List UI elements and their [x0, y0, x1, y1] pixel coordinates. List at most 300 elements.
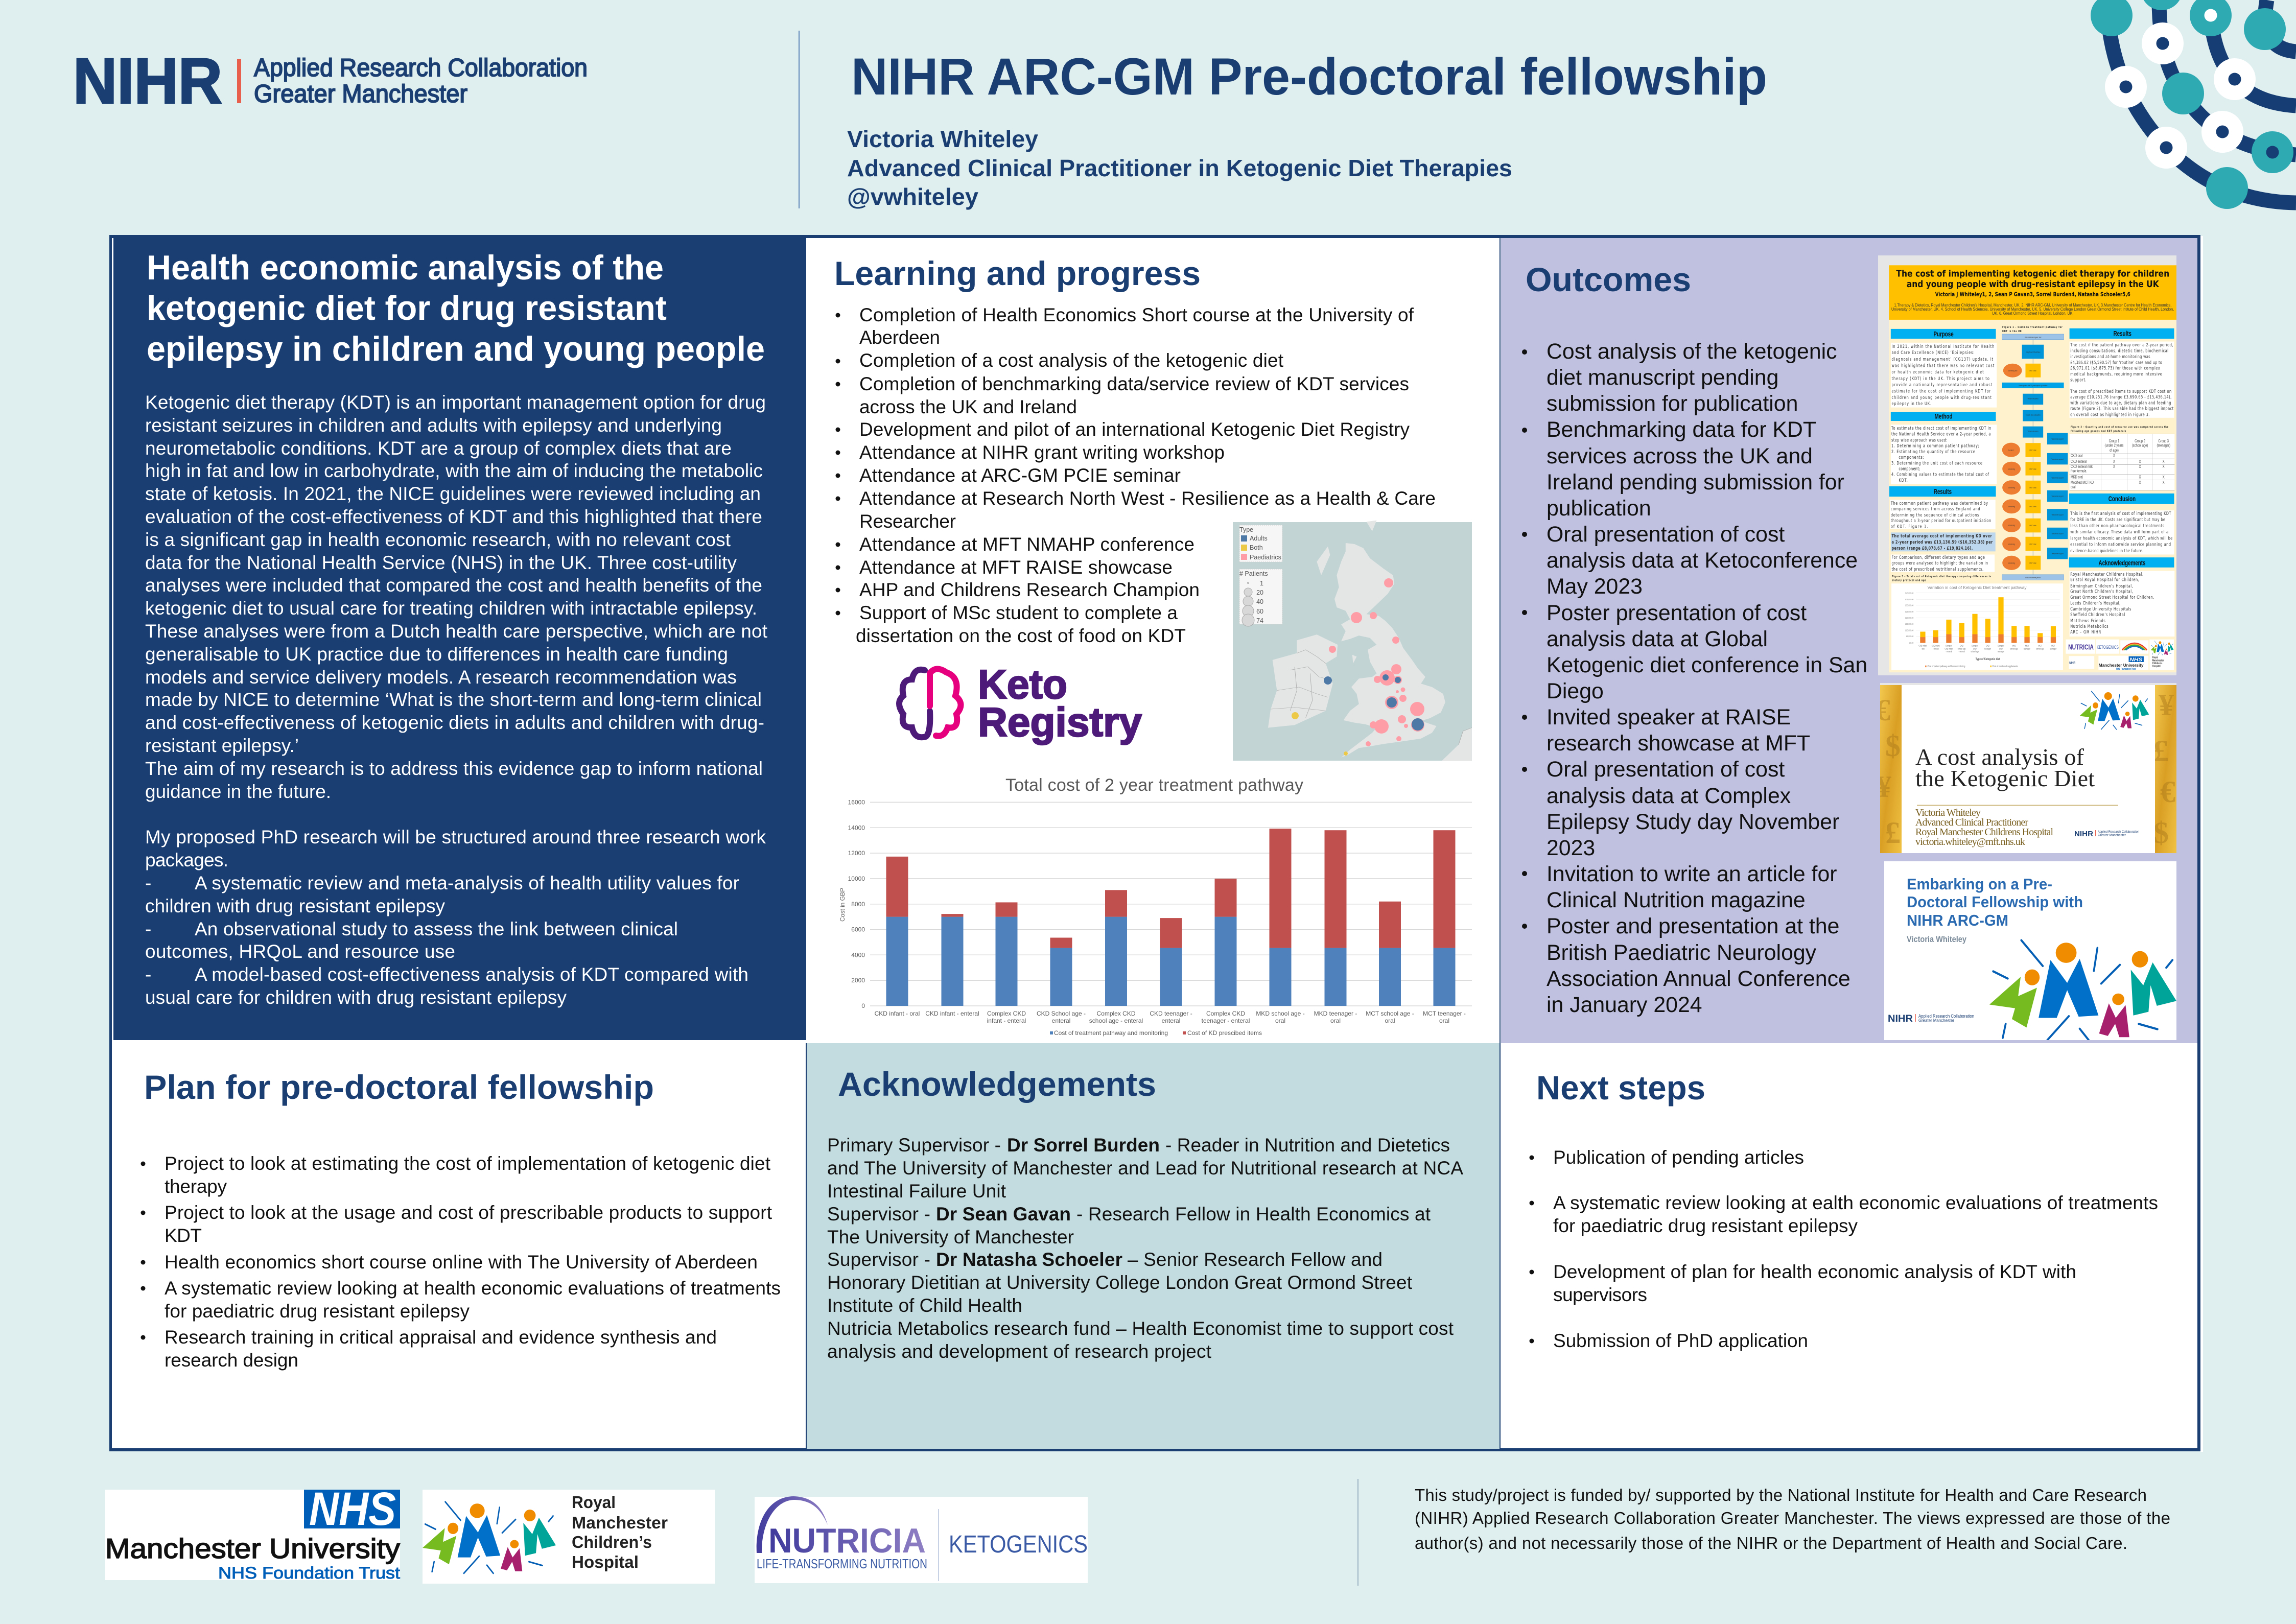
bar chart: total cost of 2 year treatment pathway: 12000	[848, 850, 865, 857]
bar chart: total cost of 2 year treatment pathway: oral	[1330, 1017, 1341, 1024]
poster chart: £10,000.00	[1905, 629, 1914, 632]
acknowledgements text	[827, 1135, 1463, 1362]
poster chart: - oral	[1921, 647, 1925, 650]
thumbnail: conference poster: components;	[1899, 455, 1924, 460]
thumbnail: conference poster: KDT.	[1899, 478, 1908, 483]
bar chart: total cost of 2 year treatment pathway: oral	[1385, 1017, 1395, 1024]
poster flow diagram: Monitoring	[2008, 543, 2015, 546]
acknowledgements text: – Senior Research Fellow and	[1128, 1249, 1383, 1270]
poster chart: Complex	[1946, 644, 1952, 647]
thumbnail: conference poster: The cost of prescribed items to support KDT cost on	[2070, 389, 2171, 394]
bullet list: learning activities: Attendance at ARC-GM PCIE seminar	[859, 465, 1181, 486]
bar chart: total cost of 2 year treatment pathway: 2000	[851, 977, 865, 984]
poster flow diagram: Screening and	[2008, 369, 2017, 372]
chart title: Total cost of 2 year treatment pathway	[1005, 775, 1303, 795]
bar chart: total cost of 2 year treatment pathway: enteral	[1052, 1017, 1070, 1024]
heading: acknowledgements: Acknowledgements	[838, 1065, 1156, 1103]
panel heading	[147, 248, 765, 368]
bar chart: total cost of 2 year treatment pathway: 8000	[851, 901, 865, 908]
thumbnail: Embarking on a Pre-Doctoral Fellowship slide: NIHR ARC-GM	[1907, 911, 2008, 929]
thumbnail: conference poster: the cost of prescribed nutritional supplements.	[1891, 567, 1983, 572]
heading: outcomes: Outcomes	[1526, 261, 1691, 298]
poster flow diagram: MDT clinic	[2030, 468, 2036, 470]
thumbnail: conference poster: Cambridge University Hospitals	[2070, 606, 2131, 611]
acknowledgements text: Supervisor -	[827, 1249, 930, 1270]
body text	[145, 392, 768, 1008]
thumbnail: conference poster: dietary protocol and age	[1892, 579, 1926, 582]
logo: Manchester University NHS Foundation Trust: NHS Foundation Trust	[218, 1564, 400, 1582]
logo: Royal Manchester Children's Hospital: Hospital	[572, 1552, 639, 1571]
poster chart: £35,000.00	[1905, 598, 1914, 601]
bullet list: plan: research design	[165, 1350, 298, 1371]
poster chart: school age	[2036, 647, 2044, 650]
thumbnail: A cost analysis of the Ketogenic Diet slide: £	[1885, 816, 1901, 850]
bar chart: total cost of 2 year treatment pathway: oral	[1439, 1017, 1449, 1024]
funding statement: This study/project is funded by/ supported by the National Institute for Health and Care Research	[1415, 1486, 2147, 1504]
thumbnail: conference poster: Results	[1934, 488, 1952, 496]
thumbnail: conference poster: Sheffield Children’s Hospital	[2070, 612, 2125, 617]
poster flow diagram: Telephone support	[2051, 514, 2064, 516]
bullet list: outcomes: Cost analysis of the ketogenic	[1547, 339, 1837, 364]
thumbnail: conference poster: or health economic data for ketogenic diet	[1891, 369, 1984, 374]
bar chart: total cost of 2 year treatment pathway: 16000	[848, 799, 865, 806]
thumbnail: conference poster: for DRE in the UK. Costs are significant but may be	[2070, 517, 2165, 522]
poster flow diagram: If under 2	[2008, 449, 2014, 452]
bar chart: total cost of 2 year treatment pathway: Complex CKD	[1206, 1010, 1245, 1017]
poster flow diagram: Monitoring	[2008, 468, 2015, 470]
bar chart: total cost of 2 year treatment pathway: MKD teenager -	[1314, 1010, 1357, 1017]
thumbnail: conference poster: determining the sequence of clinical actions	[1891, 512, 1979, 517]
thumbnail: conference poster: and young people with drug-resistant epilepsy in the UK	[1907, 278, 2160, 290]
bar chart: total cost of 2 year treatment pathway: oral	[1275, 1017, 1285, 1024]
body text: usual care for children with drug resistant epilepsy	[145, 987, 567, 1008]
map legend: patients: 74	[1256, 617, 1263, 624]
poster flow diagram: Virtual education	[2028, 397, 2039, 400]
poster flow diagram: Telephone support	[2051, 477, 2064, 479]
poster flow diagram: MDT clinic	[2030, 543, 2036, 546]
poster logos: Manchester University	[2099, 663, 2144, 668]
poster chart: £0.00	[1909, 641, 1914, 644]
thumbnail: conference poster: Group 2	[2135, 439, 2145, 443]
acknowledgements text: - Reader in Nutrition and Dietetics	[1165, 1135, 1450, 1156]
poster chart: £15,000.00	[1905, 622, 1914, 625]
thumbnail: Embarking on a Pre-Doctoral Fellowship slide: Embarking on a Pre-	[1907, 875, 2052, 893]
bullet list: learning activities: Support of MSc student to complete a	[859, 602, 1178, 623]
map legend: patients: 1	[1260, 580, 1263, 587]
heading: learning and progress: Learning and progress	[834, 254, 1201, 292]
thumbnail: conference poster: support.	[2070, 378, 2087, 383]
bar chart: total cost of 2 year treatment pathway: CKD infant - enteral	[925, 1010, 979, 1017]
poster chart: school age	[2010, 647, 2018, 650]
poster flow diagram: Telephone support	[2051, 438, 2064, 440]
thumbnail: conference poster: X	[2163, 465, 2165, 469]
poster chart: CKD	[1986, 644, 1989, 647]
thumbnail: conference poster: (school age)	[2132, 444, 2148, 448]
panel: plan for pre-doctoral fellowship	[112, 1040, 806, 1448]
poster flow diagram: Telephone/Virtual/New	[2026, 351, 2041, 354]
thumbnail: A cost analysis of the Ketogenic Diet slide: Greater Manchester	[2098, 834, 2126, 837]
panel: acknowledgements	[806, 1043, 1501, 1449]
bullet list: next steps	[1530, 1147, 2158, 1351]
bullet list: outcomes: research showcase at MFT	[1547, 731, 1810, 756]
map legend: type: Both	[1250, 544, 1263, 551]
thumbnail: conference poster: diagnosis and management’ (CG137) update, it	[1891, 357, 1993, 362]
thumbnail: conference poster: The total average cost of implementing KD over	[1891, 533, 1992, 538]
poster flow diagram: MDT clinic	[2030, 449, 2036, 452]
body text: A systematic review and meta-analysis of health utility values for	[195, 873, 739, 893]
acknowledgements text: The University of Manchester	[827, 1227, 1074, 1248]
map: KDT services across UK and Ireland	[1233, 521, 1472, 761]
poster chart: - enteral	[1959, 650, 1965, 653]
thumbnail: A cost analysis of the Ketogenic Diet slide: A cost analysis of	[1915, 744, 2084, 770]
bullet list: learning activities: dissertation on the cost of food on KDT	[856, 625, 1186, 646]
thumbnail: conference poster: To estimate the direct cost of implementing KDT in	[1891, 426, 1991, 431]
thumbnail: conference poster: with similar efficacy. These data will form part of a	[2070, 529, 2168, 534]
thumbnail: conference poster: on overall cost as highlighted in Figure 3.	[2070, 412, 2149, 417]
logo: NIHR Applied Research Collaboration Greater Manchester: NIHR	[73, 45, 222, 117]
bar chart: total cost of 2 year treatment pathway: 0	[861, 1002, 865, 1009]
poster chart: teenager	[2024, 647, 2030, 650]
bullet list: outcomes: 2023	[1547, 836, 1595, 860]
thumbnail: conference poster: Nutricia Metabolics	[2070, 624, 2108, 629]
bullet list: outcomes: submission for publication	[1547, 391, 1798, 416]
poster flow diagram	[2002, 334, 2068, 580]
thumbnail: conference poster: 3. Determining the unit cost of each resource	[1891, 460, 1982, 466]
poster chart: CKD infant	[1932, 644, 1940, 647]
acknowledgements text: Dr Sean Gavan	[936, 1204, 1071, 1225]
bullet list: learning activities: Attendance at NIHR grant writing workshop	[859, 442, 1225, 463]
bullet list: outcomes: analysis data at Global	[1547, 627, 1768, 651]
thumbnail: conference poster: provide a nationally representative and robust	[1891, 382, 1992, 387]
poster chart: £20,000.00	[1905, 617, 1914, 619]
logo: NIHR Applied Research Collaboration Greater Manchester	[73, 45, 588, 117]
logo: Manchester University NHS Foundation Trust: NHS	[309, 1483, 396, 1535]
logo: Royal Manchester Children's Hospital: Royal	[572, 1493, 616, 1512]
poster chart: MCT	[2051, 644, 2055, 647]
map legend: patients	[1239, 569, 1282, 626]
thumbnail: conference poster: 2. Estimating the quantity of the resource	[1891, 449, 1975, 454]
bullet list: outcomes: publication	[1547, 496, 1651, 521]
acknowledgements text: - Research Fellow in Health Economics at	[1076, 1204, 1431, 1225]
poster logos	[2066, 640, 2174, 670]
bullet list: plan: Project to look at estimating the cost of implementation of ketogenic diet	[165, 1153, 771, 1174]
thumbnail: conference poster: Leeds Children’s Hospital,	[2070, 601, 2120, 606]
thumbnail: conference poster: X	[2113, 454, 2115, 458]
thumbnail: A cost analysis of the Ketogenic Diet slide: Royal Manchester Childrens Hospital	[1915, 827, 2053, 838]
poster chart: Cost of patient pathway and home monitoring	[1928, 665, 1965, 668]
thumbnail: conference poster: X	[2163, 481, 2165, 485]
thumbnail: conference poster	[1878, 255, 2176, 675]
poster chart: Complex	[1972, 644, 1978, 647]
bar chart: total cost of 2 year treatment pathway: 4000	[851, 951, 865, 958]
bullet list: next steps: A systematic review looking at ealth economic evaluations of treatments	[1553, 1192, 2158, 1213]
poster chart: Complex	[1998, 644, 2004, 647]
logo: Nutricia Ketogenics: LIFE-TRANSFORMING NUTRITION	[757, 1556, 927, 1571]
poster flow diagram: End of treatment period	[2025, 577, 2041, 579]
thumbnail: A cost analysis of the Ketogenic Diet slide	[1875, 683, 2176, 853]
thumbnail: conference poster: evidence-based guidelines in the future.	[2070, 548, 2143, 553]
bullet list: learning activities: Attendance at MFT RAISE showcase	[859, 557, 1173, 578]
chart legend	[1050, 1029, 1262, 1037]
thumbnail: conference poster: Figure 1 – Common Treatment pathway for	[2002, 326, 2063, 329]
poster flow diagram: Face to face education	[2026, 414, 2041, 416]
thumbnail: A cost analysis of the Ketogenic Diet slide: Advanced Clinical Practitioner	[1915, 817, 2028, 828]
thumbnail: conference poster: children and young people with drug-resistant	[1891, 395, 1992, 400]
map legend: type: Paediatrics	[1250, 554, 1281, 561]
thumbnail: conference poster: Modified MCT KD	[2071, 481, 2094, 485]
thumbnail: conference poster: £4,386.02 ($5,590.57) for ‘routine’ care and up to	[2070, 360, 2162, 365]
poster flow diagram: Monitoring	[2008, 524, 2015, 527]
acknowledgements text: Primary Supervisor -	[827, 1135, 1001, 1156]
logo: Keto Registry	[899, 662, 1142, 745]
acknowledgements text: Institute of Child Health	[827, 1295, 1022, 1316]
bullet list: outcomes: Poster presentation of cost	[1547, 601, 1807, 625]
author details	[847, 126, 1512, 210]
panel: outcomes	[1501, 238, 2197, 1043]
body text: models and service delivery models. A research recommendation was	[145, 667, 737, 688]
bullet list: learning activities: Attendance at MFT NMAHP conference	[859, 534, 1194, 555]
thumbnail: conference poster: comparing services from across England and	[1891, 506, 1980, 511]
thumbnail: conference poster: therapy (KDT) in the UK. This project aims to	[1891, 376, 1989, 381]
thumbnail: conference poster: estimate for the cost of implementing KDT for	[1891, 388, 1991, 394]
thumbnail: conference poster: with variations due to age, dietary plan and feeding	[2070, 400, 2171, 406]
bullet list: plan: Project to look at the usage and cost of prescribable products to support	[165, 1202, 772, 1223]
bullet list: outcomes: Invitation to write an article for	[1547, 862, 1837, 886]
thumbnail: conference poster: (under 2 years	[2105, 444, 2124, 448]
logo: NIHR Applied Research Collaboration Greater Manchester: Applied Research Collaboration	[254, 54, 588, 82]
map legend: type: Adults	[1250, 535, 1268, 542]
body text: My proposed PhD research will be structured around three research work	[145, 827, 766, 848]
bullet list: learning activities: Completion of Health Economics Short course at the University of	[859, 304, 1414, 325]
bullet list: next steps: Submission of PhD application	[1553, 1330, 1808, 1351]
bar chart: total cost of 2 year treatment pathway: Complex CKD	[1096, 1010, 1136, 1017]
thumbnail: A cost analysis of the Ketogenic Diet slide: €	[1875, 693, 1890, 727]
body text: resistant seizures in children and adults with epilepsy and underlying	[145, 415, 722, 436]
logo: Nutricia Ketogenics: KETOGENICS	[949, 1531, 1088, 1558]
body text: These analyses were from a Dutch health care perspective, which are not	[145, 621, 768, 642]
bullet list: outcomes: Diego	[1547, 679, 1604, 703]
bullet list: outcomes: diet manuscript pending	[1547, 365, 1778, 390]
panel heading: ketogenic diet for drug resistant	[147, 289, 667, 327]
map legend: patients: 40	[1256, 598, 1263, 605]
body text: evaluation of the cost-effectiveness of KDT and this highlighted that there	[145, 506, 762, 527]
thumbnail: A cost analysis of the Ketogenic Diet slide: ¥	[1876, 770, 1891, 804]
bullet list: outcomes: Association Annual Conference	[1547, 967, 1850, 991]
body text: and cost-effectiveness of ketogenic diets in adults and children with drug-	[145, 712, 764, 733]
body text: -	[145, 919, 151, 939]
icon: network of arcs and dots	[2091, 0, 2296, 209]
funding statement	[1415, 1486, 2170, 1552]
poster chart: £25,000.00	[1905, 610, 1914, 613]
thumbnail: conference poster: X	[2139, 460, 2141, 464]
poster chart: CKD infant	[1918, 644, 1927, 647]
chart legend: Cost of KD prescibed items	[1187, 1029, 1262, 1037]
thumbnail: conference poster: £6,971.01 ($8,875.73) for those with complex	[2070, 366, 2160, 371]
body text: is a significant gap in health economic research, with no relevant cost	[145, 529, 731, 550]
body text: ketogenic diet to usual care for treating children with intractable epilepsy.	[145, 598, 757, 619]
bullet list: plan: Health economics short course online with The University of Aberdeen	[165, 1252, 758, 1273]
panel: health economic analysis	[113, 238, 806, 1040]
body text: resistant epilepsy.’	[145, 735, 299, 756]
map legend: patients: 60	[1256, 608, 1263, 615]
acknowledgements text: Honorary Dietitian at University College London Great Ormond Street	[827, 1272, 1413, 1293]
bullet list: outcomes: Clinical Nutrition magazine	[1547, 888, 1806, 912]
thumbnail: conference poster: Method	[1935, 413, 1952, 420]
logo: Keto Registry: Keto	[978, 662, 1067, 707]
thumbnail: A cost analysis of the Ketogenic Diet slide: the Ketogenic Diet	[1915, 765, 2095, 791]
bullet list: learning activities: Attendance at Research North West - Resilience as a Health & Care	[859, 488, 1436, 509]
bullet list: learning activities	[836, 304, 1436, 646]
poster chart: £5,000.00	[1906, 635, 1914, 638]
poster chart: teenager	[2050, 647, 2057, 650]
thumbnail: conference poster: essential to inform nationwide service planning and	[2070, 542, 2171, 547]
poster chart: MKD	[2025, 644, 2029, 647]
poster chart: Variation in cost of Ketogenic Diet treatment pathway	[1928, 585, 2027, 590]
body text: analyses were included that compared the cost and health benefits of the	[145, 575, 762, 596]
bullet list: outcomes: Epilepsy Study day November	[1547, 810, 1839, 834]
thumbnail: conference poster: This is the first analysis of cost of implementing KDT	[2070, 511, 2171, 516]
thumbnail: A cost analysis of the Ketogenic Diet slide: $	[2153, 816, 2169, 850]
thumbnail: conference poster: 1. Determining a common patient pathway;	[1891, 443, 1979, 449]
bullet list: learning activities: across the UK and Ireland	[859, 396, 1077, 417]
thumbnail: Embarking on a Pre-Doctoral Fellowship slide: NIHR	[1888, 1014, 1913, 1024]
bullet list: next steps: for paediatric drug resistant epilepsy	[1553, 1215, 1858, 1236]
bullet list: outcomes: May 2023	[1547, 574, 1643, 599]
thumbnail: Embarking on a Pre-Doctoral Fellowship slide: Applied Research Collaboration	[1918, 1014, 1974, 1019]
thumbnail: conference poster: University of Manchester, UK. 4. School of Health Sciences, University of Manchester, UK. 5. University College London Great Ormond Street Intitute of Child Health, London,	[1891, 308, 2174, 312]
thumbnail: A cost analysis of the Ketogenic Diet slide: ¥	[2159, 688, 2174, 722]
body text: The aim of my research is to address this evidence gap to inform national	[145, 758, 763, 779]
thumbnail: Embarking on a Pre-Doctoral Fellowship slide	[1884, 861, 2176, 1040]
poster chart: teenager	[1998, 650, 2004, 653]
poster logos: NHS	[2129, 656, 2143, 663]
thumbnail: conference poster: free formula	[2071, 469, 2087, 474]
poster flow diagram: MDT clinic	[2030, 525, 2036, 527]
thumbnail: conference poster: step wise approach was used:	[1891, 437, 1947, 443]
logo: NIHR Applied Research Collaboration Greater Manchester: Greater Manchester	[254, 80, 467, 108]
poster logos: Hospital	[2152, 665, 2161, 668]
poster flow diagram: Virtual education	[2028, 430, 2039, 432]
poster flow diagram: MDT clinic	[2030, 486, 2036, 489]
acknowledgements text: Nutricia Metabolics research fund – Health Economist time to support cost	[827, 1318, 1454, 1339]
map legend: patients: 20	[1256, 589, 1263, 596]
bar chart: total cost of 2 year treatment pathway: Cost in GBP	[839, 888, 846, 922]
thumbnail: conference poster: of age)	[2110, 449, 2119, 453]
thumbnail: conference poster: Great Ormond Street Hospital for Children,	[2070, 595, 2154, 600]
thumbnail: conference poster: oral	[2071, 485, 2076, 489]
bullet list: next steps: Publication of pending articles	[1553, 1147, 1804, 1168]
thumbnail: conference poster: Group 3	[2158, 439, 2169, 443]
poster flow diagram: Monitoring	[2008, 486, 2015, 489]
body text: Ketogenic diet therapy (KDT) is an important management option for drug	[145, 392, 766, 413]
body text: made by NICE to determine ‘What is the short-term and long-term clinical	[145, 689, 762, 710]
body text: state of ketosis. In 2021, the NICE guidelines were reviewed including an	[145, 483, 761, 504]
bullet list: learning activities: Researcher	[859, 511, 956, 532]
poster flow diagram: Telephone support	[2051, 532, 2064, 535]
thumbnail: conference poster: X	[2113, 465, 2115, 469]
poster chart: CKD	[1960, 644, 1963, 647]
poster chart: school age	[1958, 647, 1965, 650]
heading: next steps: Next steps	[1536, 1069, 1705, 1107]
poster logos: Royal	[2152, 656, 2158, 660]
poster chart: school age	[1971, 650, 1979, 653]
thumbnail: conference poster: CKD enteral milk	[2071, 465, 2093, 469]
poster flow diagram: Development of KDT prescription by dietitian	[2019, 385, 2047, 387]
poster chart: CKD infant	[1944, 647, 1953, 650]
poster chart: - enteral	[1946, 650, 1952, 653]
poster logos: NHS Foundation Trust	[2116, 668, 2136, 670]
body text: An observational study to assess the link between clinical	[195, 919, 678, 939]
thumbnail: conference poster: was highlighted that there was no relevant cost	[1891, 363, 1994, 368]
poster chart: CKD	[1973, 647, 1977, 650]
thumbnail: conference poster: the National Health Service over a 2-year period, a	[1891, 432, 1990, 437]
logo: Royal Manchester Children's Hospital: Children’s	[572, 1533, 652, 1551]
bar chart: total cost of 2 year treatment pathway	[839, 775, 1472, 1037]
thumbnail: conference poster: Birmingham Children’s Hospital,	[2070, 583, 2133, 589]
thumbnail: conference poster: The cost if the patient pathway over a 2-year period,	[2070, 342, 2173, 347]
thumbnail: A cost analysis of the Ketogenic Diet slide: Applied Research Collaboration	[2098, 831, 2139, 834]
bullet list: outcomes: Oral presentation of cost	[1547, 757, 1785, 782]
thumbnail: conference poster: MKD oral	[2071, 476, 2083, 480]
bullet list: outcomes: Poster and presentation at the	[1547, 914, 1839, 938]
body text: guidance in the future.	[145, 781, 331, 802]
acknowledgements text: and The University of Manchester and Lead for Nutritional research at NCA	[827, 1158, 1463, 1179]
thumbnail: conference poster: Figure 3 – Total cost of Ketogenic diet therapy comparing differences in	[1892, 575, 1991, 578]
thumbnail: A cost analysis of the Ketogenic Diet slide: $	[1885, 729, 1901, 763]
body text: -	[145, 964, 151, 985]
bar chart: total cost of 2 year treatment pathway: infant - enteral	[987, 1017, 1026, 1024]
thumbnail: conference poster: X	[2163, 460, 2165, 464]
bullet list: learning activities: Development and pilot of an international Ketogenic Diet Registry	[859, 419, 1410, 440]
thumbnail: conference poster: less than other non-pharmacological treatments	[2070, 523, 2164, 529]
thumbnail: conference poster: following age groups and KDT protocols	[2071, 430, 2126, 433]
body text: children with drug resistant epilepsy	[145, 896, 446, 916]
bullet list: plan	[141, 1153, 781, 1371]
thumbnail: conference poster: person (range £8,078.67 - £19,824.16).	[1891, 546, 1973, 551]
bullet list: next steps: Development of plan for health economic analysis of KDT with	[1553, 1261, 2076, 1282]
thumbnail: conference poster: For Comparison, different dietary types and age	[1891, 555, 1985, 560]
thumbnail: conference poster: Victoria J Whiteley1, 2, Sean P Gavan3, Sorrel Burden4, Natasha Schoeler5,6	[1935, 291, 2130, 298]
bar chart: total cost of 2 year treatment pathway: 6000	[851, 926, 865, 933]
logo: Nutricia Ketogenics: NUTRICIA	[768, 1521, 926, 1560]
thumbnail: A cost analysis of the Ketogenic Diet slide: NIHR	[2074, 830, 2093, 838]
bar chart: total cost of 2 year treatment pathway: school age - enteral	[1089, 1017, 1143, 1024]
bar chart: total cost of 2 year treatment pathway: CKD teenager -	[1150, 1010, 1192, 1017]
thumbnail: conference poster: Group 1	[2109, 439, 2119, 443]
bar chart: total cost of 2 year treatment pathway: enteral	[1162, 1017, 1180, 1024]
thumbnail: Embarking on a Pre-Doctoral Fellowship slide: Victoria Whiteley	[1907, 934, 1966, 944]
body text: -	[145, 873, 151, 893]
thumbnail: conference poster: of KDT. Figure 1.	[1891, 524, 1928, 529]
thumbnail: conference poster: UK. 6. Great Ormond Street Hospital, London, UK.	[1992, 312, 2073, 316]
author details: Advanced Clinical Practitioner in Ketogenic Diet Therapies	[847, 155, 1512, 181]
poster chart: teenager	[1984, 647, 1992, 650]
poster logos: KETOGENICS	[2097, 645, 2119, 650]
body text: data for the National Health Service (NHS) in the UK. Three cost-utility	[145, 552, 737, 573]
bullet list: next steps: supervisors	[1553, 1284, 1647, 1305]
poster logos: Children’s	[2152, 662, 2163, 665]
thumbnail: conference poster: investigations and at-home monitoring was	[2070, 354, 2150, 359]
panel heading: Health economic analysis of the	[147, 248, 664, 287]
thumbnail: Embarking on a Pre-Doctoral Fellowship slide: Greater Manchester	[1918, 1018, 1954, 1023]
body text: outcomes, HRQoL and resource use	[145, 941, 455, 962]
body text: packages.	[145, 850, 228, 870]
thumbnail: conference poster: and Care Excellence (NICE) ‘Epilepsies:	[1891, 350, 1974, 356]
body text: A model-based cost-effectiveness analysis of KDT compared with	[195, 964, 748, 985]
thumbnail: conference poster: X	[2113, 460, 2115, 464]
thumbnail: conference poster: 1.Therapy & Dietetics, Royal Manchester Children’s Hospital, Manchester, UK. 2. NIHR ARC-GM, University of Manchester, UK. 3.Manchester Centre for Health Economics,	[1894, 303, 2171, 308]
poster flow diagram: Referral for ketogenic diet	[2025, 336, 2042, 338]
